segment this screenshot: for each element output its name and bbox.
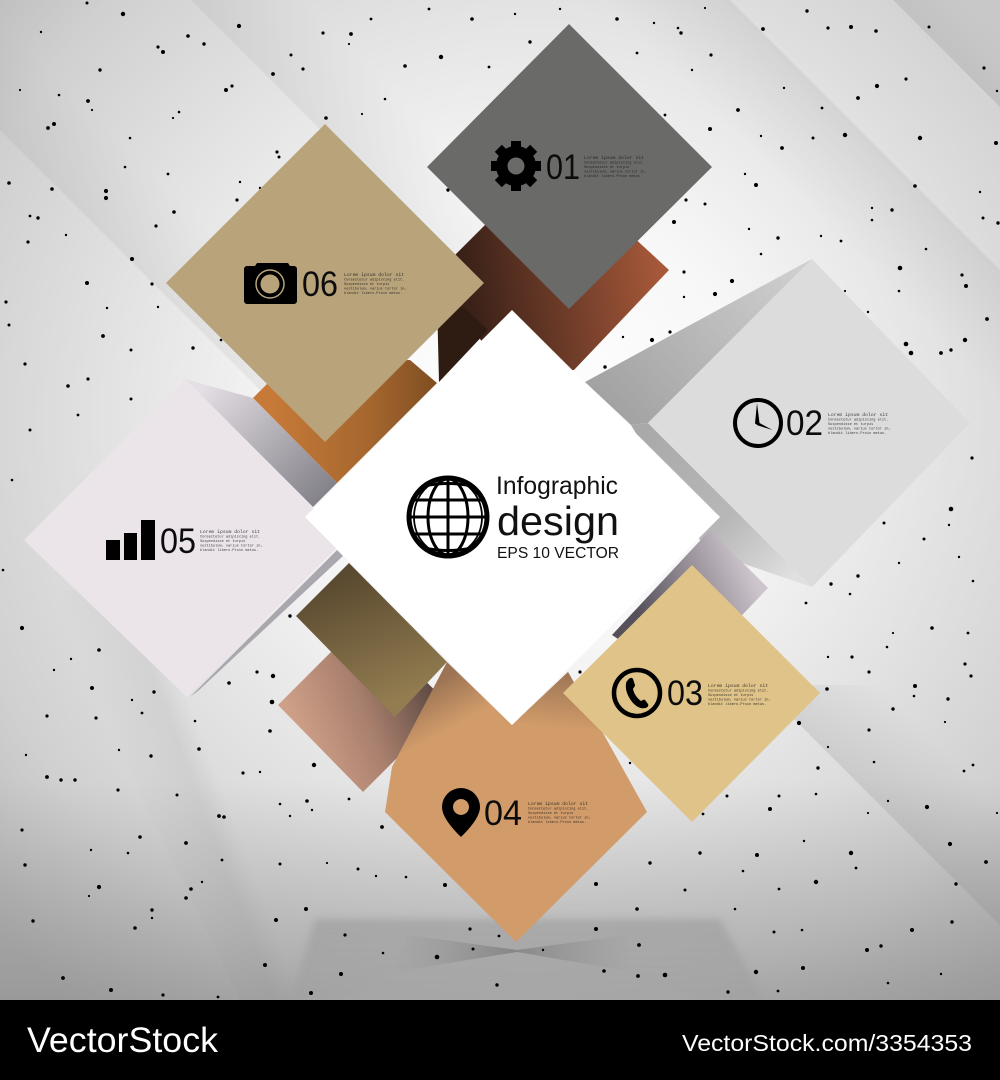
text block 04: blandit libero.Proin metus. xyxy=(528,820,586,825)
text block 01: blandit libero.Proin metus. xyxy=(584,174,642,179)
text block 02: vestibulum, varius tortor in, xyxy=(828,426,891,432)
text block 02: Consectetur adipiscing elit. xyxy=(828,418,888,422)
panel 02 xyxy=(585,259,970,587)
panel 04 right shading xyxy=(512,672,603,733)
band behind panel 06 xyxy=(253,360,437,483)
text block 05: vestibulum, varius tortor in, xyxy=(200,544,263,548)
text block 03: Suspendisse et turpis xyxy=(708,693,753,698)
text block 06: Suspendisse et turpis xyxy=(344,282,389,287)
centre panel xyxy=(305,310,720,725)
text block 01: Lorem ipsum dolor sit xyxy=(584,155,644,161)
panel 04 xyxy=(385,662,647,942)
text block 04: Consectetur adipiscing elit. xyxy=(528,806,588,812)
text block 03: blandit libero.Proin metus. xyxy=(708,702,766,707)
icon: gear xyxy=(491,141,541,191)
footer bar xyxy=(0,1000,1000,1080)
panel 03 face xyxy=(563,565,820,822)
text block 06: Lorem ipsum dolor sit xyxy=(344,272,404,278)
heading: Infographic xyxy=(496,473,618,500)
text block 06: Consectetur adipiscing elit. xyxy=(344,278,404,282)
icon: map pin xyxy=(442,788,480,837)
heading xyxy=(496,473,619,562)
icon: phone xyxy=(614,670,660,716)
number 06: 06 xyxy=(302,265,338,304)
text block 06: vestibulum, varius tortor in, xyxy=(344,286,407,292)
olive square xyxy=(296,563,447,717)
text block 04: Suspendisse et turpis xyxy=(528,811,573,816)
footer logo: VectorStock xyxy=(27,1021,219,1060)
heading: design xyxy=(497,498,619,544)
fold wedge bottom xyxy=(631,423,812,587)
fold strip bottom xyxy=(190,550,343,697)
text block 04: vestibulum, varius tortor in, xyxy=(528,816,591,820)
fold wedge top xyxy=(185,379,337,507)
number 04: 04 xyxy=(484,794,522,833)
panel 06 xyxy=(166,124,484,442)
fold wedge top xyxy=(585,259,812,425)
panel 03 xyxy=(563,565,820,822)
number 03: 03 xyxy=(667,674,703,713)
text block 03: Lorem ipsum dolor sit xyxy=(708,683,768,689)
footer url: VectorStock.com/3354353 xyxy=(682,1030,972,1056)
text block 03: Consectetur adipiscing elit. xyxy=(708,688,768,694)
icon: clock xyxy=(735,400,781,446)
number 01: 01 xyxy=(546,148,580,187)
panel 05 face xyxy=(24,379,345,697)
text block 02: Suspendisse et turpis xyxy=(828,422,873,427)
text block 05: blandit libero.Proin metus. xyxy=(200,548,258,553)
text block 05: Suspendisse et turpis xyxy=(200,539,245,544)
centre face xyxy=(305,310,720,725)
number 02: 02 xyxy=(786,404,823,443)
text block 01: Suspendisse et turpis xyxy=(584,165,629,170)
icon: bar chart xyxy=(106,520,155,560)
text block 05: Consectetur adipiscing elit. xyxy=(200,534,260,540)
text block 02: Lorem ipsum dolor sit xyxy=(828,412,888,418)
icon: globe xyxy=(409,478,487,556)
band behind panel 04 xyxy=(278,620,450,792)
panel 01 face xyxy=(427,24,712,309)
text block 01: vestibulum, varius tortor in, xyxy=(584,170,647,174)
number 05: 05 xyxy=(160,522,196,561)
panel 01 xyxy=(427,24,712,309)
text block 05: Lorem ipsum dolor sit xyxy=(200,529,260,535)
text block 06: blandit libero.Proin metus. xyxy=(344,291,402,296)
text block 04: Lorem ipsum dolor sit xyxy=(528,801,588,807)
text block 03: vestibulum, varius tortor in, xyxy=(708,698,771,702)
text block 01: Consectetur adipiscing elit. xyxy=(584,160,644,166)
panel 06 face xyxy=(166,124,484,442)
panel 04 face xyxy=(385,662,647,942)
heading: EPS 10 VECTOR xyxy=(497,545,619,562)
band behind panel 03 xyxy=(612,530,768,680)
panel 05 xyxy=(24,379,345,697)
floor shadow xyxy=(290,919,765,1000)
panel 02 face xyxy=(648,259,970,587)
band behind panel 01 xyxy=(440,160,669,370)
dark fold xyxy=(437,300,488,382)
icon: camera xyxy=(244,263,297,304)
text block 02: blandit libero.Proin metus. xyxy=(828,431,886,436)
